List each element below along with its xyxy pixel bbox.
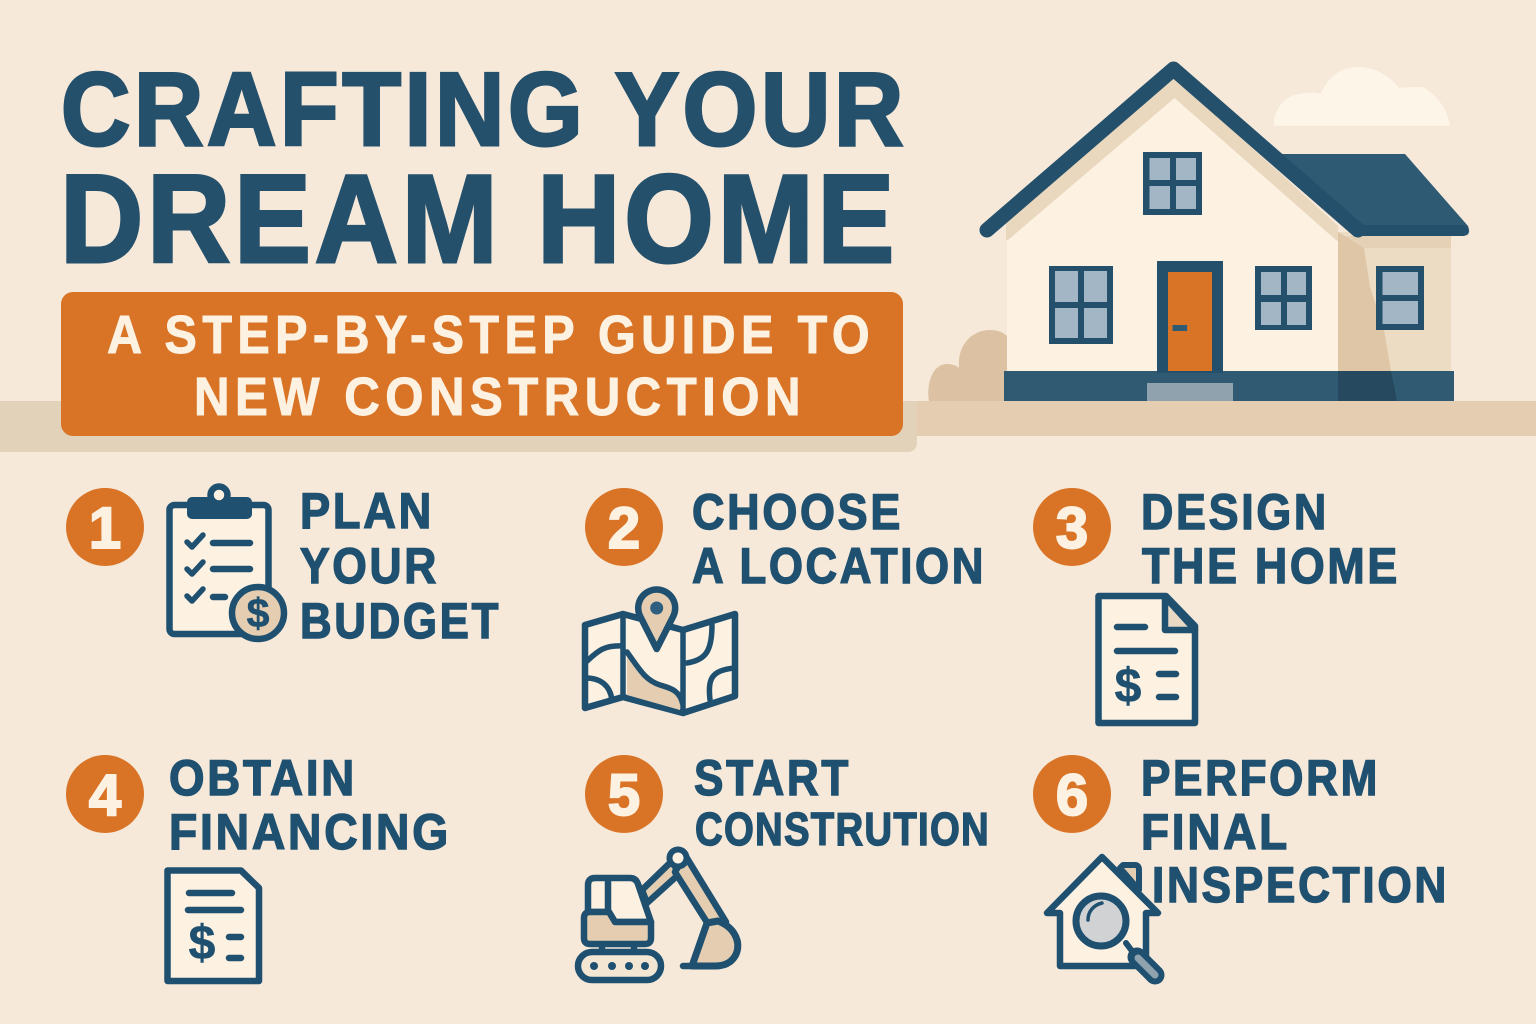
step 5: start construction (578, 750, 990, 980)
title: DREAM HOME (60, 150, 898, 289)
step 2: choose a location (585, 484, 986, 713)
subtitle banner: NEW CONSTRUCTION (194, 367, 806, 427)
icon: document with fold (1098, 596, 1195, 723)
attic window (1143, 152, 1202, 215)
side roof (1281, 154, 1469, 236)
step 5 label: CONSTRUTION (695, 803, 990, 855)
cloud (1274, 67, 1450, 126)
subtitle banner (61, 292, 903, 436)
step 3 label: DESIGN (1141, 484, 1329, 540)
side extension wall (1338, 232, 1451, 371)
step 4 label: OBTAIN (169, 750, 357, 806)
foundation (1004, 371, 1454, 401)
number badge 3: 3 (1056, 496, 1088, 561)
house illustration (987, 69, 1469, 401)
number badge 3 (1033, 488, 1111, 566)
step 6 label: INSPECTION (1152, 857, 1449, 913)
number badge 5 (585, 755, 663, 833)
icon: clipboard with coin: $ (247, 590, 270, 636)
icon: excavator (578, 850, 738, 980)
gable shade (1006, 76, 1338, 241)
step 5 label: START (694, 750, 851, 806)
step 6 label: PERFORM (1141, 750, 1380, 806)
step 4 label (169, 750, 451, 860)
left window (1049, 266, 1113, 344)
icon: clipboard with coin (170, 486, 284, 639)
number badge 2 (585, 488, 663, 566)
number badge 1: 1 (89, 496, 121, 561)
number badge 6 (1033, 755, 1111, 833)
step 3 label: THE HOME (1142, 538, 1400, 594)
number badge 2: 2 (608, 496, 640, 561)
number badge 5: 5 (608, 763, 640, 828)
middle window (1255, 266, 1312, 330)
step 1 label: PLAN (300, 483, 434, 539)
number badge 4: 4 (89, 763, 121, 828)
step 2 label: A LOCATION (692, 538, 986, 594)
step 2 label (692, 484, 986, 594)
step 4 label: FINANCING (169, 804, 451, 860)
step 1 label (300, 483, 501, 649)
step 1 label: YOUR (300, 538, 439, 594)
extension eave shadow (1338, 236, 1451, 248)
main roof (987, 69, 1358, 230)
step 6: perform final inspection (1033, 750, 1449, 975)
icon: financing document (168, 870, 259, 981)
step 5 label (694, 750, 990, 855)
wall cast shadow (1338, 232, 1391, 371)
number badge 4 (66, 755, 144, 833)
door (1157, 261, 1223, 373)
right window (1376, 266, 1424, 330)
step 6 label: FINAL (1141, 804, 1290, 860)
step 1: plan your budget (66, 483, 501, 649)
step 1 label: BUDGET (300, 593, 501, 649)
icon: document with fold: $ (1115, 660, 1142, 713)
ground strip (0, 401, 1536, 452)
title (60, 52, 907, 289)
step 3 label (1141, 484, 1400, 594)
icon: house with magnifier (1047, 857, 1158, 975)
number badge 6: 6 (1056, 763, 1088, 828)
bush (928, 330, 1007, 401)
icon: map with pin (585, 590, 735, 713)
subtitle banner: A STEP-BY-STEP GUIDE TO (107, 305, 875, 365)
step 2 label: CHOOSE (692, 484, 903, 540)
number badge 1 (66, 488, 144, 566)
front step (1147, 383, 1233, 401)
step 6 label (1141, 750, 1449, 913)
step 3: design the home (1033, 484, 1400, 723)
step 4: obtain financing (66, 750, 451, 981)
title: CRAFTING YOUR (61, 52, 907, 168)
main wall (1007, 78, 1338, 371)
icon: financing document: $ (189, 917, 216, 970)
